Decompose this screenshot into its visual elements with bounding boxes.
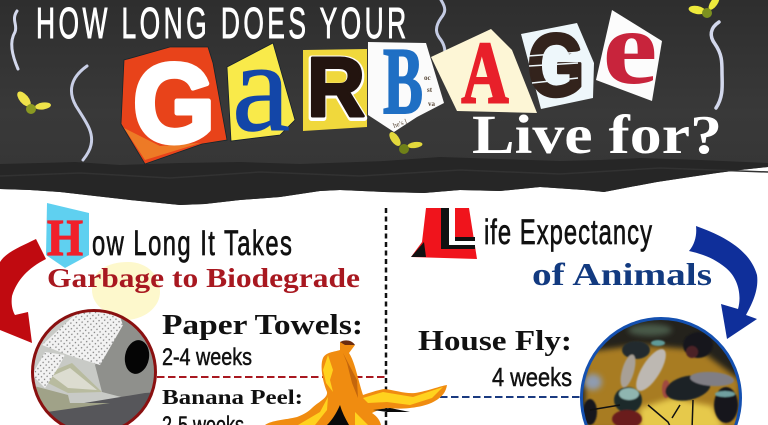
item: blue dashed leader	[440, 396, 582, 398]
item: paper towels value: 2-4 weeks	[162, 344, 252, 371]
item: banana peel label: Banana Peel:	[162, 385, 303, 409]
icon: H badge: H	[47, 210, 83, 267]
item: house fly label: House Fly:	[418, 326, 572, 357]
heading: life expectancy: ife Expectancy	[484, 214, 652, 252]
letter B on newsprint: st	[427, 86, 433, 94]
arrow: red curved	[0, 239, 46, 343]
panel: biodegrade	[0, 203, 386, 425]
icon: fly left	[15, 89, 51, 114]
letter R on yellow: R	[306, 41, 366, 137]
photo: paper towel roll	[30, 308, 160, 425]
letter B on newsprint: B	[383, 28, 423, 134]
letter A on cream: A	[462, 25, 508, 122]
letter G on white: G	[527, 16, 585, 116]
icon: stink swirl 3	[436, 0, 445, 57]
item: paper towels label: Paper Towels:	[162, 309, 363, 341]
icon: fly centre	[387, 130, 423, 154]
centre dashed divider	[385, 208, 387, 425]
letter G on orange: G	[133, 41, 215, 166]
letter B on newsprint: he's l	[392, 117, 408, 130]
panel: animals	[411, 208, 757, 425]
letter A on cream	[431, 25, 537, 122]
heading: how long it takes: ow Long It Takes	[92, 225, 292, 263]
icon: L badge	[411, 208, 477, 259]
word art: GARBAGE ransom letters	[121, 0, 662, 166]
arrow: blue curved	[689, 226, 757, 339]
item: red dashed leader	[157, 376, 386, 378]
heading: of animals: of Animals	[532, 256, 712, 292]
letter B on newsprint: va	[428, 100, 436, 108]
title line: Live for?: Live for?	[472, 104, 722, 165]
icon: fly right	[688, 0, 721, 18]
illustration: banana peel	[265, 340, 447, 425]
icon: stink swirl 4	[711, 22, 722, 108]
icon: stink swirl 2	[71, 66, 92, 160]
letter B on newsprint: oc	[424, 74, 431, 82]
letter a on yellow: a	[232, 16, 290, 158]
yellow blob behind heading	[92, 262, 160, 320]
header: chalkboard banner with torn edge	[0, 0, 768, 205]
icon: stink swirl 1	[12, 11, 18, 69]
photo: house flies	[580, 317, 742, 425]
letter R on yellow: R	[307, 40, 365, 134]
heading: garbage to biodegrade: Garbage to Biodegrade	[47, 263, 360, 293]
item: house fly value: 4 weeks	[492, 362, 572, 392]
